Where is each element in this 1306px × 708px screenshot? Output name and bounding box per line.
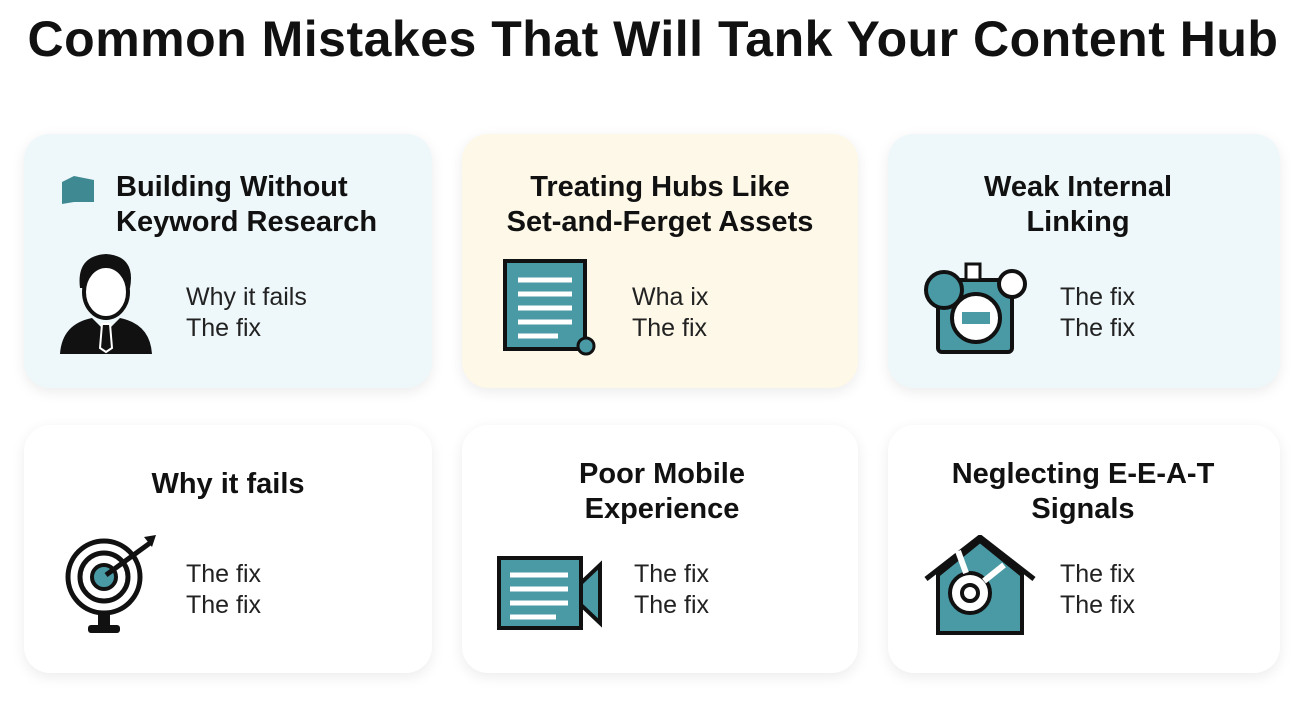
heading <box>507 171 813 238</box>
panel: keyword research <box>24 134 432 388</box>
heading <box>984 171 1172 238</box>
heading: Treating Hubs Like <box>530 171 790 203</box>
icon: target <box>66 535 156 633</box>
text: Why it fails <box>186 283 307 311</box>
text: The fix <box>186 591 261 619</box>
title: Common Mistakes That Will Tank Your Content Hub <box>28 11 1278 67</box>
heading: Keyword Research <box>116 206 377 238</box>
text <box>632 283 708 342</box>
text: Wha ix <box>632 283 708 311</box>
heading: Signals <box>1031 493 1135 525</box>
heading: Poor Mobile <box>579 458 745 490</box>
text: The fix <box>1060 314 1135 342</box>
icon: person <box>60 254 152 354</box>
text: The fix <box>632 314 707 342</box>
text: The fix <box>1060 560 1135 588</box>
heading: Weak Internal <box>984 171 1172 203</box>
heading: Set-and-Ferget Assets <box>507 206 813 238</box>
text: The fix <box>186 314 261 342</box>
text <box>186 283 307 342</box>
text <box>634 560 709 619</box>
text: The fix <box>1060 591 1135 619</box>
icon: video <box>497 556 602 630</box>
heading: Neglecting E-E-A-T <box>952 458 1214 490</box>
heading: Building Without <box>116 171 348 203</box>
heading <box>579 458 745 525</box>
icon: device <box>924 262 1027 354</box>
heading <box>952 458 1214 525</box>
text: The fix <box>634 560 709 588</box>
panel: set and forget <box>462 134 858 388</box>
heading: Linking <box>1026 206 1130 238</box>
text: The fix <box>1060 283 1135 311</box>
icon: document <box>503 259 596 356</box>
icon: small house <box>62 176 94 204</box>
heading <box>116 171 377 238</box>
heading: Experience <box>585 493 739 525</box>
heading: Why it fails <box>151 468 305 500</box>
text: The fix <box>186 560 261 588</box>
text: The fix <box>634 591 709 619</box>
text <box>186 560 261 619</box>
icon: house with target <box>924 535 1036 635</box>
panel: internal linking <box>888 134 1280 388</box>
panel: why it fails <box>24 425 432 673</box>
text <box>1060 560 1135 619</box>
panel: E-E-A-T <box>888 425 1280 673</box>
panel: mobile <box>462 425 858 673</box>
text <box>1060 283 1135 342</box>
